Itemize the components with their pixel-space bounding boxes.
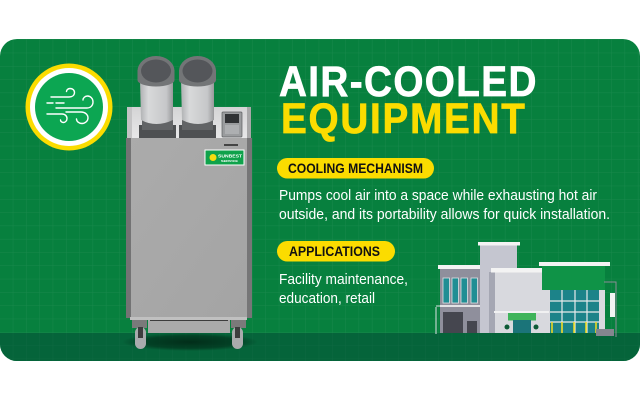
description text: Facility maintenance,: [279, 272, 408, 288]
green brand label: [205, 150, 244, 165]
floor band: [0, 333, 640, 361]
illustration: commercial building: [436, 242, 616, 337]
air-cooled unit: [122, 56, 258, 351]
right wing with green roof and glass facade: [539, 262, 616, 337]
right caster: [231, 320, 246, 349]
description text: Pumps cool air into a space while exhausting hot air: [279, 188, 597, 204]
street lamp: [436, 306, 442, 334]
applications section: [277, 241, 408, 307]
left wing: [438, 265, 480, 333]
cooling mechanism section: [277, 158, 610, 223]
center wing: [491, 268, 549, 333]
heading pill: [277, 158, 434, 178]
tower: [478, 242, 520, 333]
title: AIR-COOLED: [279, 57, 536, 105]
title: EQUIPMENT: [281, 94, 525, 142]
icon: wind badge: [26, 64, 112, 150]
green brand label: SERVICE: [221, 159, 238, 163]
right exhaust tube: [179, 56, 216, 138]
title: [279, 57, 536, 142]
heading pill: COOLING MECHANISM: [288, 161, 423, 176]
unit top panel: [127, 107, 251, 139]
left caster: [132, 320, 147, 349]
description text: education, retail: [279, 291, 375, 307]
left exhaust tube: [138, 56, 176, 138]
description text: [279, 188, 610, 223]
brand mark: [224, 144, 238, 146]
unit body: [126, 138, 252, 333]
green brand label: SUNBEST: [218, 154, 242, 158]
heading pill: APPLICATIONS: [289, 244, 380, 259]
floor shadow: [122, 333, 258, 351]
control panel: [222, 112, 242, 137]
description text: outside, and its portability allows for quick installation.: [279, 207, 610, 223]
description text: [279, 272, 408, 307]
